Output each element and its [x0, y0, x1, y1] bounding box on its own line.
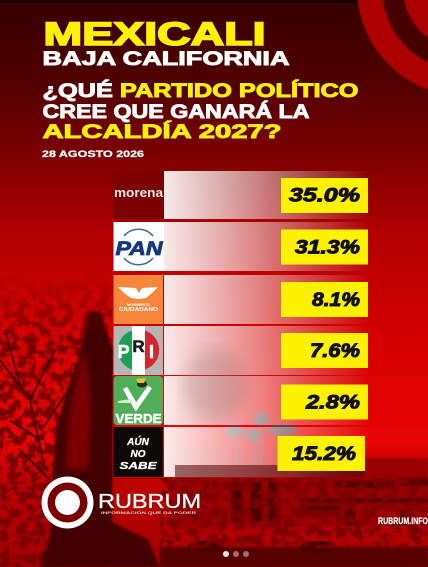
- logo: PAN: [114, 222, 164, 271]
- value: Aún no sabe: [278, 436, 365, 471]
- background: palms: [225, 412, 297, 465]
- background: tree: [0, 272, 428, 567]
- value: PRI: [281, 333, 368, 368]
- title: state: BAJA CALIFORNIA: [42, 48, 290, 70]
- logo: Verde: VERDE: [116, 412, 162, 426]
- logo: Movimiento Ciudadano: [114, 275, 163, 324]
- background: statue: [40, 311, 160, 567]
- row: Aún no sabe: [114, 427, 370, 477]
- value: PRI: 7.6%: [310, 341, 360, 362]
- logo: Aún no sabe: NO: [130, 449, 146, 460]
- question heading: CREE QUE GANARÁ LA: [42, 101, 310, 123]
- logo: Movimiento Ciudadano: CIUDADANO: [119, 307, 158, 313]
- value: Movimiento Ciudadano: 8.1%: [312, 290, 360, 311]
- date: 28 AGOSTO 2026: [42, 149, 144, 160]
- value: morena: 35.0%: [289, 186, 360, 206]
- logo: PRI: R: [132, 337, 145, 356]
- wordmark: RUBRUM: [98, 491, 201, 513]
- logo: PRI: [114, 326, 163, 375]
- title: city: MEXICALI: [44, 16, 266, 52]
- value: Movimiento Ciudadano: [281, 282, 368, 317]
- value: Verde: 2.8%: [305, 392, 360, 414]
- logo: Aún no sabe: [114, 427, 163, 477]
- question heading: ALCALDÍA 2027?: [42, 121, 282, 143]
- value: morena: [281, 178, 368, 213]
- row: PAN: [114, 222, 370, 271]
- value: Verde: [281, 384, 368, 420]
- logo: Aún no sabe: SABE: [120, 461, 157, 472]
- logo: Movimiento Ciudadano: MOVIMIENTO: [127, 303, 150, 307]
- question heading: [42, 80, 358, 143]
- row: Movimiento Ciudadano: [114, 275, 370, 324]
- value: PAN: [281, 230, 368, 264]
- value: Aún no sabe: 15.2%: [292, 444, 356, 465]
- row: PRI: [114, 326, 370, 375]
- title: [42, 16, 290, 70]
- logo: PRI: P: [117, 342, 130, 362]
- background: faint tree over rows: [183, 349, 247, 421]
- background: ground: [160, 530, 428, 567]
- tagline: INFORMACIÓN QUE DA PODER: [101, 510, 197, 515]
- logo: Verde: [114, 376, 163, 426]
- logo: Aún no sabe: AÚN: [126, 435, 150, 448]
- icon: target: [42, 476, 94, 528]
- logo: morena: [113, 171, 164, 219]
- question heading: ¿QUÉ PARTIDO POLÍTICO: [42, 80, 358, 102]
- row: morena: [113, 171, 370, 219]
- logo: morena: morena: [114, 186, 164, 200]
- background: target rings: [357, 0, 428, 96]
- logo: RUBRUM: [42, 476, 201, 528]
- carousel dots: [223, 551, 249, 557]
- row: Verde: [114, 376, 370, 426]
- logo: PRI: I: [149, 342, 154, 362]
- background: building: [170, 458, 428, 546]
- value: PAN: 31.3%: [295, 238, 360, 258]
- logo: PAN: PAN: [116, 239, 164, 260]
